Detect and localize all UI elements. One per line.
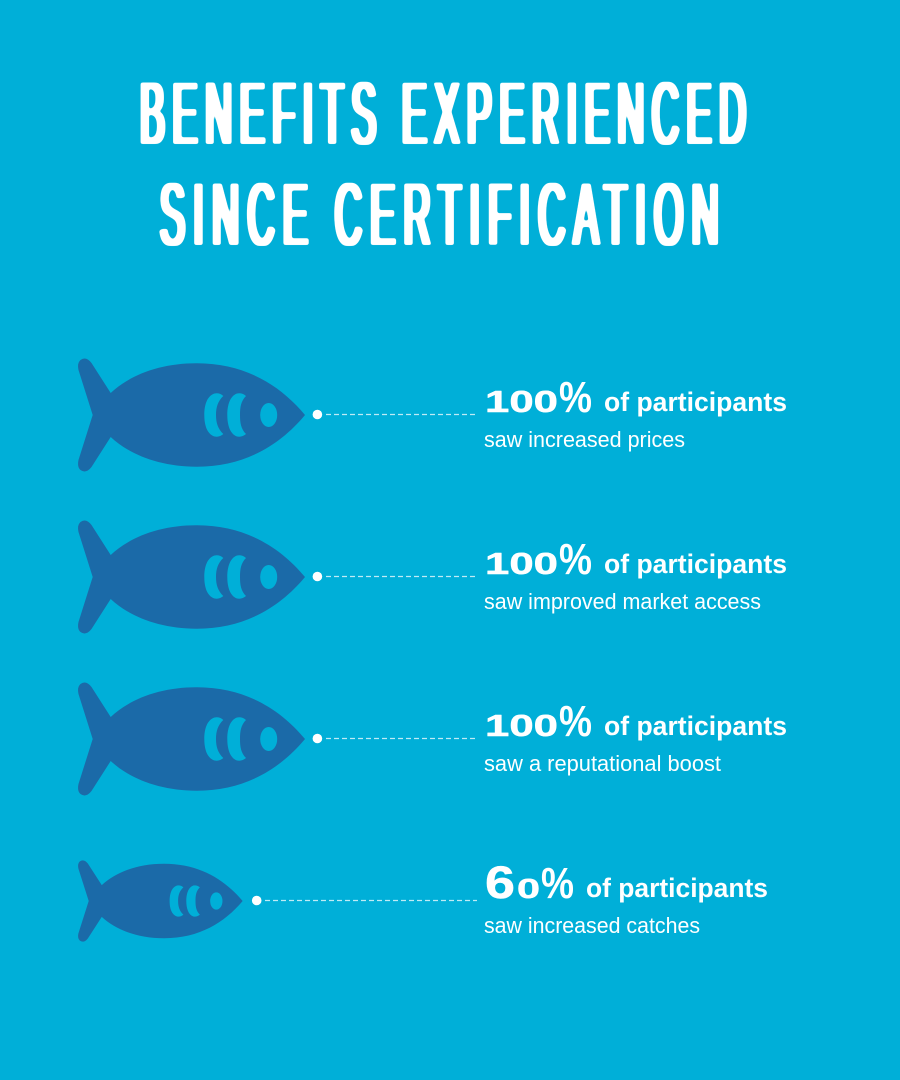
row: reputational boost [78,683,787,795]
icon: fish [78,683,305,795]
stat text: % [559,697,592,746]
stat text: 0 [517,873,540,904]
stat text: 100 [485,546,558,581]
row: improved market access [78,521,787,633]
stat text: % [559,373,592,422]
stat text: saw a reputational boost [484,751,721,776]
stat text: 6 [485,857,515,908]
icon: fish [78,521,305,633]
stat text [484,373,787,452]
stat text: saw increased catches [484,913,700,938]
stat text [484,535,787,614]
title: BENEFITS EXPERIENCED [140,64,746,164]
stat text: saw increased prices [484,427,685,452]
connector dot and dashed line [252,896,477,905]
stat text: 100 [485,384,558,419]
stat text: of participants [604,549,787,579]
stat text: of participants [586,873,768,903]
icon: small fish [78,860,243,942]
stat text [484,857,768,938]
connector dot and dashed line [313,734,477,743]
stat text: saw improved market access [484,589,761,614]
title [140,64,746,265]
row: increased prices [78,359,787,471]
connector dot and dashed line [313,410,477,419]
stat text: of participants [604,387,787,417]
stat text: % [559,535,592,584]
stat text: 100 [485,708,558,743]
stat text [484,697,787,776]
icon: fish [78,359,305,471]
row: increased catches [78,857,768,942]
stat text: of participants [604,711,787,741]
stat text: % [541,859,574,908]
connector dot and dashed line [313,572,477,581]
title: SINCE CERTIFICATION [160,165,719,265]
